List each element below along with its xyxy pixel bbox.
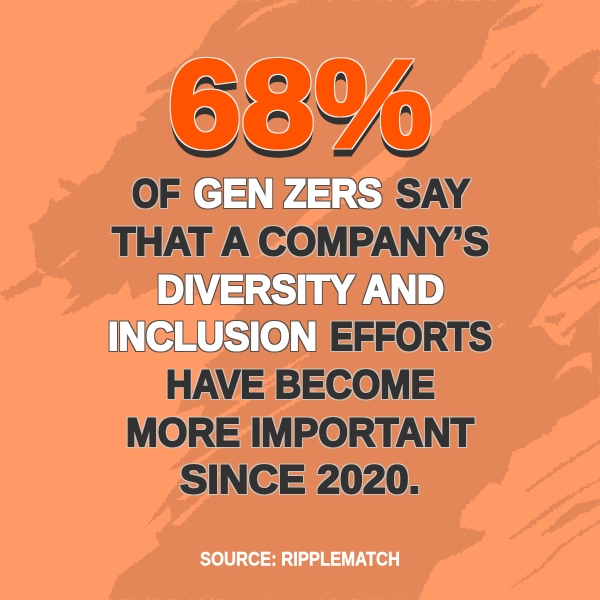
headline: 68%: 68% <box>168 36 432 174</box>
line 5: HAVE BECOME <box>166 363 435 407</box>
source credit: SOURCE: RIPPLEMATCH <box>200 550 400 570</box>
statement text <box>108 172 492 502</box>
line 1: SAY <box>396 172 470 216</box>
line 1: GEN ZERS <box>194 172 382 216</box>
line 6: MORE IMPORTANT <box>126 411 474 455</box>
line 4: INCLUSION <box>108 315 317 359</box>
line 3: DIVERSITY AND <box>157 268 444 312</box>
line 1: OF <box>132 172 180 216</box>
line 1 <box>132 172 470 216</box>
line 7: SINCE 2020. <box>180 458 420 502</box>
line 4: EFFORTS <box>330 315 492 359</box>
line 2: THAT A COMPANY’S <box>112 220 489 264</box>
line 4 <box>108 315 492 359</box>
